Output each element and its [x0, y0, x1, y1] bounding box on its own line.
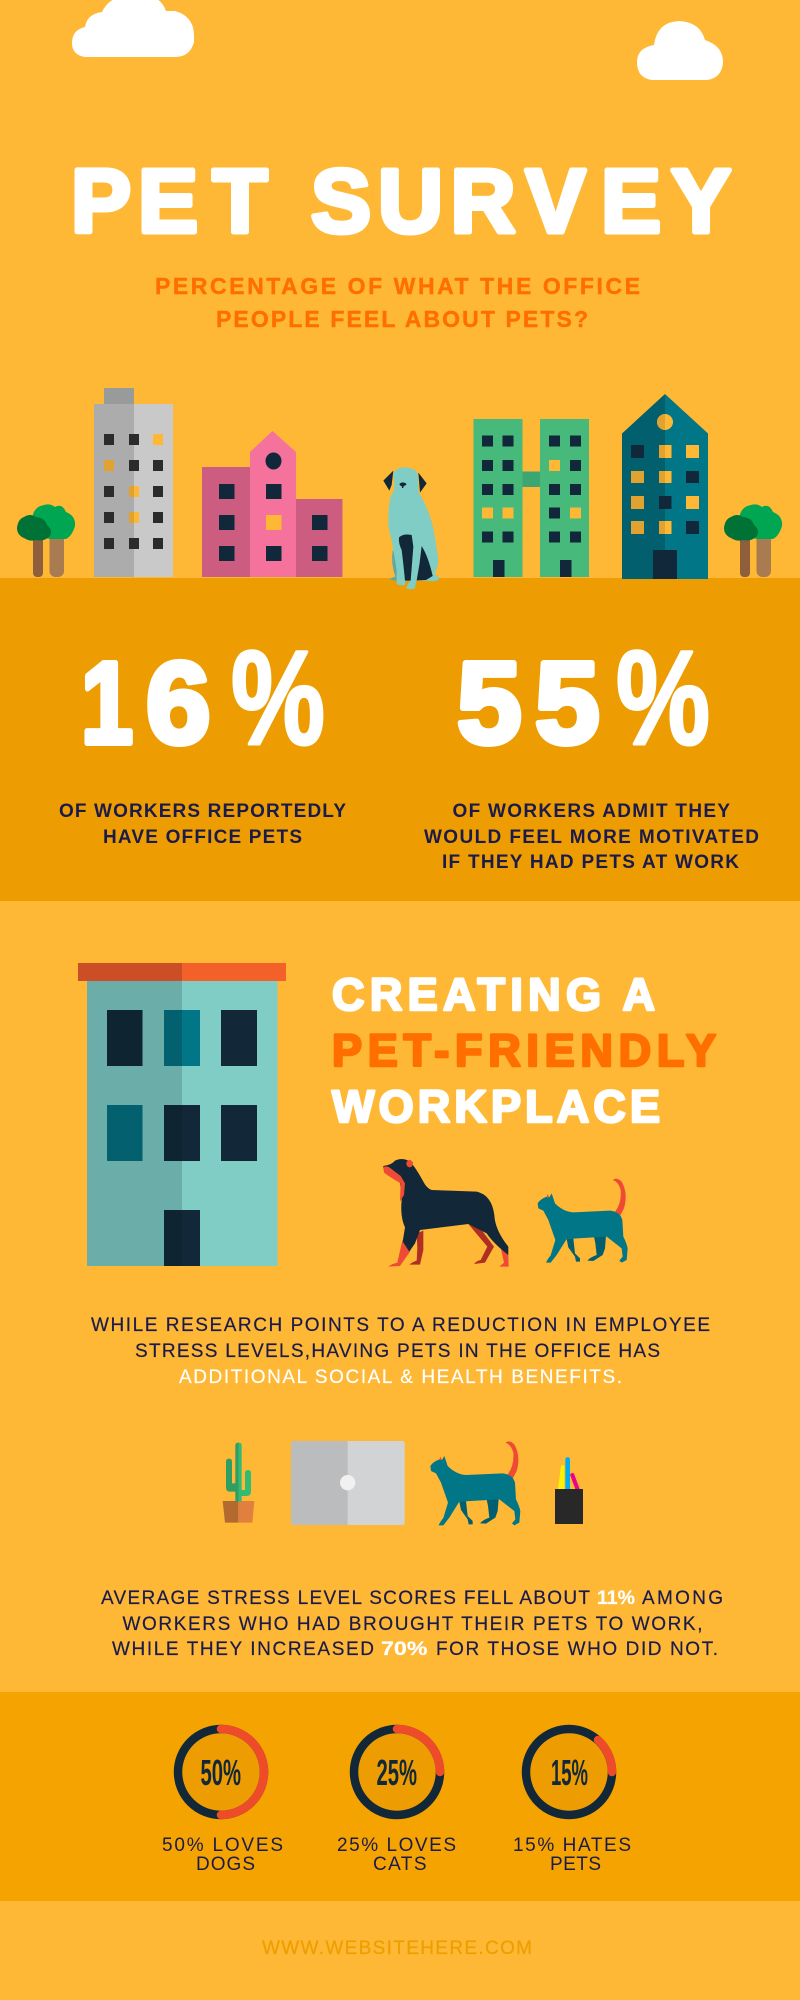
cloud: top right — [637, 21, 723, 80]
building: pink — [202, 431, 342, 577]
statistic: 16%: 6 — [146, 638, 211, 768]
text: stress paragraph: AVERAGE STRESS LEVEL SCORES FELL ABOUT — [101, 1588, 590, 1609]
donut chart: 25% loves cats: 25% — [376, 1752, 417, 1793]
icon: laptop lid — [291, 1441, 405, 1525]
text: stress paragraph: WORKERS WHO HAD BROUGHT THEIR PETS TO WORK, — [122, 1614, 703, 1635]
text: motivation stat: WOULD FEEL MORE MOTIVATED — [424, 827, 759, 848]
donut chart: 50% loves dogs: 50% LOVES — [162, 1835, 283, 1856]
cloud: top left — [72, 0, 194, 57]
heading: creating a pet-friendly workplace — [332, 969, 716, 1132]
text: motivation stat: OF WORKERS ADMIT THEY — [452, 801, 730, 822]
heading: creating a pet-friendly workplace: WORKPLACE — [332, 1081, 660, 1132]
donut chart: 15% hates pets — [513, 1729, 631, 1875]
text: office pets stat: HAVE OFFICE PETS — [103, 827, 302, 848]
donut chart: 50% loves dogs — [162, 1729, 283, 1875]
icon: cactus — [223, 1443, 254, 1523]
statistic: 55%: % — [616, 624, 710, 773]
donut chart: 50% loves dogs: 50% — [200, 1752, 241, 1793]
building: grey tower — [94, 388, 173, 577]
title: PET SURVEY — [71, 152, 731, 252]
text: stress paragraph: AMONG — [642, 1588, 723, 1609]
statistic: 55%: 55 — [457, 638, 600, 768]
donut chart: 25% loves cats — [337, 1729, 456, 1875]
donut chart: 15% hates pets: 15% HATES — [513, 1835, 631, 1856]
donut chart: 25% loves cats: 25% LOVES — [337, 1835, 456, 1856]
statistic: 16%: 1 — [81, 638, 133, 768]
donut chart: 50% loves dogs: DOGS — [196, 1854, 255, 1875]
tree group: right — [724, 504, 782, 577]
text: stress paragraph: 11% — [597, 1588, 635, 1609]
icon: standing dog — [383, 1159, 509, 1267]
text: office pets stat: OF WORKERS REPORTEDLY — [59, 801, 346, 822]
text: research paragraph: ADDITIONAL SOCIAL & HEALTH BENEFITS. — [179, 1367, 622, 1388]
icon: sitting dog — [383, 467, 439, 589]
building: large office — [78, 963, 286, 1266]
building: teal with gable — [622, 394, 708, 579]
heading: creating a pet-friendly workplace: CREATING A — [332, 969, 655, 1020]
statistic: 16%: % — [231, 624, 325, 773]
panel: stats band — [0, 578, 800, 901]
text: motivation stat: IF THEY HAD PETS AT WORK — [442, 852, 739, 873]
text: research paragraph: WHILE RESEARCH POINTS TO A REDUCTION IN EMPLOYEE — [91, 1315, 710, 1336]
icon: pen cup — [555, 1457, 583, 1524]
donut chart: 15% hates pets: 15% — [551, 1752, 588, 1793]
building: green — [474, 419, 589, 577]
text: research paragraph — [91, 1315, 710, 1388]
subtitle: PERCENTAGE OF WHAT THE OFFICE — [155, 273, 640, 299]
statistic: 55% — [457, 624, 710, 773]
icon: cat on desk — [430, 1441, 520, 1525]
heading: creating a pet-friendly workplace: PET-FRIENDLY — [332, 1025, 716, 1076]
text: research paragraph: STRESS LEVELS,HAVING PETS IN THE OFFICE HAS — [135, 1341, 660, 1362]
panel: ring charts band — [0, 1692, 800, 1901]
text: stress paragraph — [101, 1588, 723, 1660]
donut chart: 15% hates pets: PETS — [550, 1854, 601, 1875]
footer: website: WWW.WEBSITEHERE.COM — [262, 1938, 532, 1959]
text: stress paragraph: FOR THOSE WHO DID NOT. — [436, 1639, 718, 1660]
donut chart: 25% loves cats: CATS — [373, 1854, 426, 1875]
text: stress paragraph: WHILE THEY INCREASED — [112, 1639, 374, 1660]
icon: walking cat — [538, 1179, 628, 1263]
statistic: 16% — [81, 624, 325, 773]
text: motivation stat — [424, 801, 759, 873]
tree group: left — [17, 504, 75, 577]
text: office pets stat — [59, 801, 346, 848]
text: stress paragraph: 70% — [381, 1639, 428, 1660]
subtitle: PEOPLE FEEL ABOUT PETS? — [216, 306, 588, 332]
subtitle — [155, 273, 640, 332]
